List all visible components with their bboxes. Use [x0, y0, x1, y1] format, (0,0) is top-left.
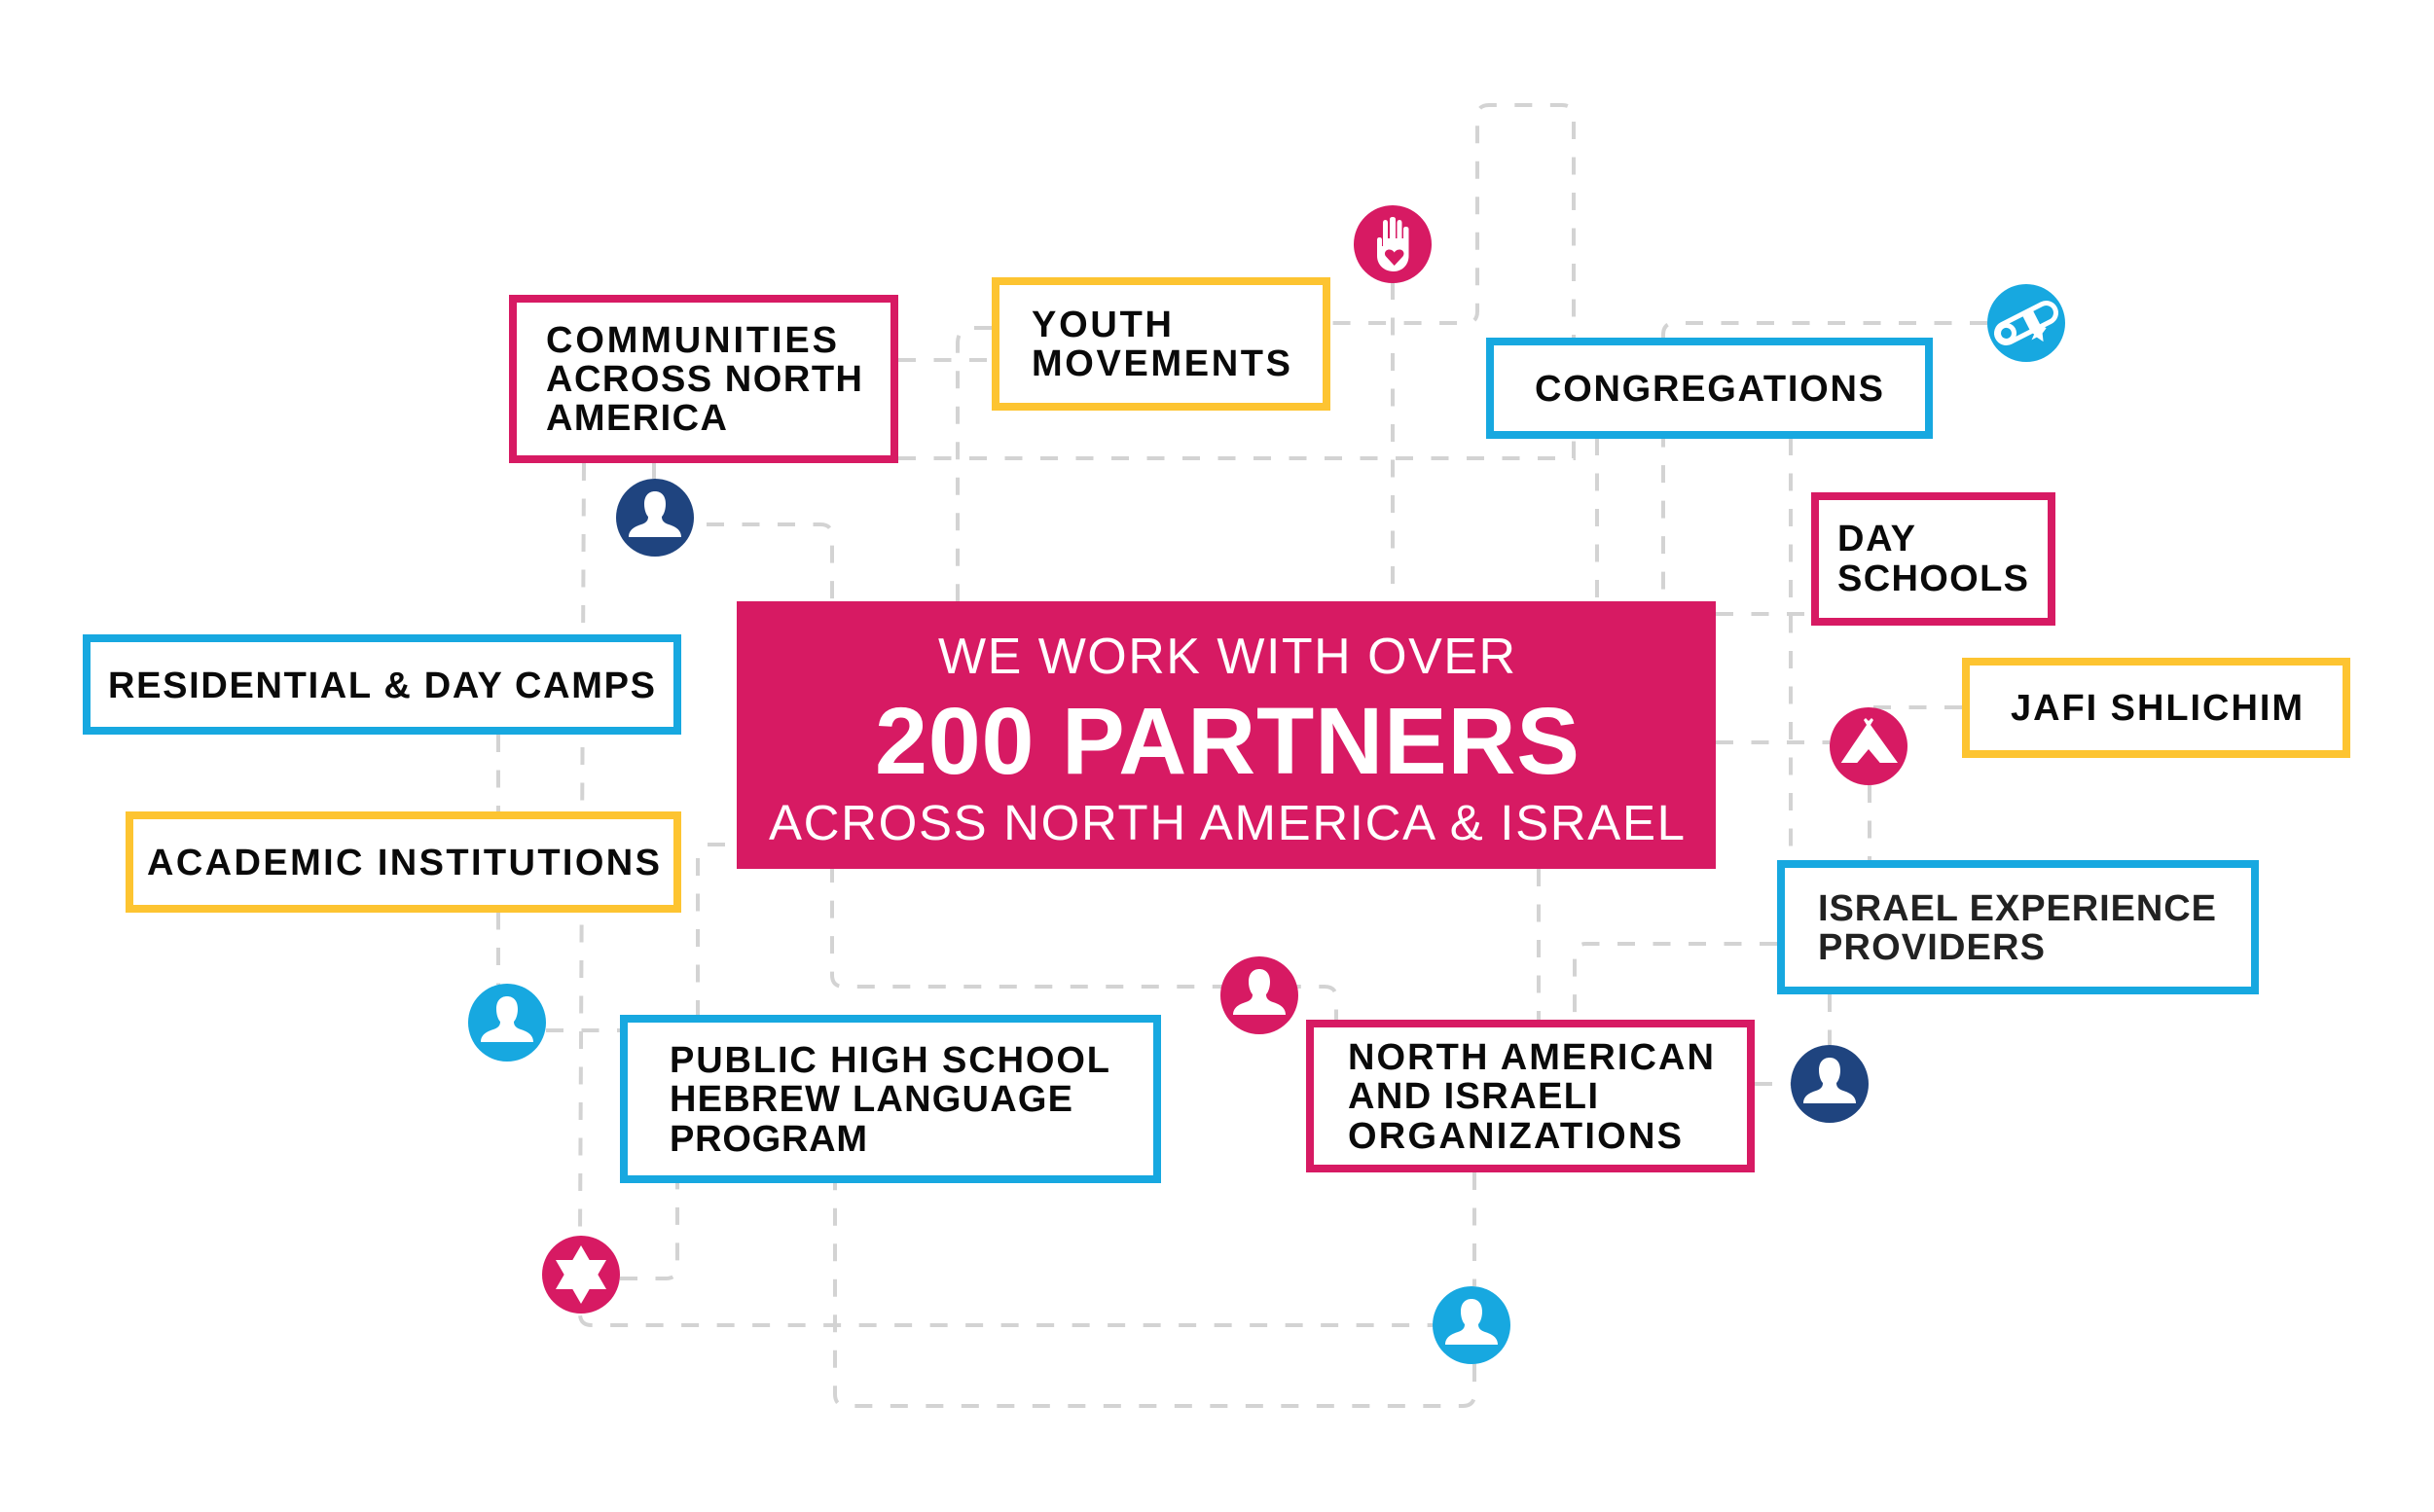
box: jafi shlichim	[1966, 662, 2346, 754]
box: public high school hebrew language program	[624, 1019, 1157, 1179]
box: north american and israeli organizations: ORGANIZATIONS	[1348, 1116, 1682, 1157]
icon: tent	[1830, 707, 1907, 785]
icon: person pink center	[1220, 956, 1298, 1034]
box: public high school hebrew language program: PUBLIC HIGH SCHOOL	[670, 1040, 1109, 1081]
box: israel experience providers: PROVIDERS	[1818, 927, 2045, 968]
box: north american and israeli organizations: AND ISRAELI	[1348, 1076, 1598, 1117]
box: public high school hebrew language program: PROGRAM	[670, 1119, 867, 1160]
box: israel experience providers	[1781, 864, 2255, 990]
dashed connector lines	[498, 105, 1987, 1406]
box: public high school hebrew language program: HEBREW LANGUAGE	[670, 1079, 1072, 1120]
box: communities across north america: COMMUNITIES	[546, 320, 837, 361]
box: day schools: DAY	[1837, 519, 1915, 559]
box: communities across north america	[513, 299, 894, 459]
box: youth movements	[996, 281, 1326, 407]
box: residential and day camps: RESIDENTIAL & DAY CAMPS	[108, 666, 655, 706]
central banner: 200 partners: WE WORK WITH OVER	[938, 629, 1515, 685]
box: north american and israeli organizations: NORTH AMERICAN	[1348, 1037, 1714, 1078]
central banner: 200 partners: 200 PARTNERS	[875, 688, 1580, 794]
box: day schools: SCHOOLS	[1837, 558, 2028, 599]
icon: person navy right	[1791, 1045, 1869, 1123]
icon: hand with heart	[1354, 205, 1432, 283]
box: youth movements: YOUTH	[1032, 305, 1172, 345]
box: academic institutions: ACADEMIC INSTITUTIONS	[147, 843, 660, 883]
box: youth movements: MOVEMENTS	[1032, 343, 1290, 384]
box: congregations: CONGREGATIONS	[1535, 369, 1883, 410]
box: north american and israeli organizations	[1310, 1024, 1751, 1169]
box: day schools	[1815, 496, 2052, 622]
box: israel experience providers: ISRAEL EXPERIENCE	[1818, 888, 2216, 929]
box: communities across north america: ACROSS NORTH	[546, 359, 862, 400]
icon: person navy top	[616, 479, 694, 557]
icon: person blue left	[468, 984, 546, 1062]
central banner: 200 partners	[737, 601, 1716, 869]
icon: person blue bottom	[1433, 1286, 1510, 1364]
box: communities across north america: AMERICA	[546, 398, 727, 439]
box: jafi shlichim: JAFI SHLICHIM	[2011, 688, 2303, 729]
box: academic institutions	[129, 815, 677, 909]
icon: star of david	[542, 1236, 620, 1314]
box: congregations	[1490, 342, 1929, 435]
icon: diploma scroll	[1987, 284, 2066, 362]
central banner: 200 partners: ACROSS NORTH AMERICA & ISRAEL	[769, 795, 1685, 850]
box: residential and day camps	[87, 638, 677, 731]
